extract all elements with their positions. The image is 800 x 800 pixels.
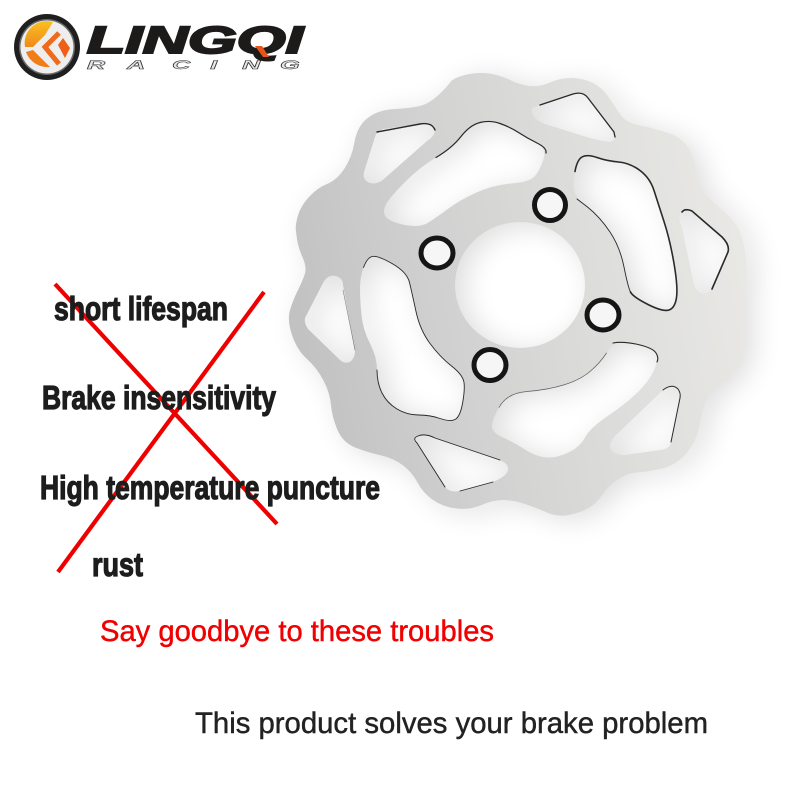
logo tagline: RACING: [87, 59, 300, 72]
brake disc photo: [289, 73, 755, 520]
slot edge shading: [343, 93, 728, 491]
problem label: rust: rust: [92, 546, 143, 583]
logo Q tail: [255, 46, 269, 57]
logo emblem: [14, 14, 80, 80]
black closing statement: This product solves your brake problem: [195, 707, 708, 740]
bolt ring: bottom: [474, 350, 506, 380]
disc soft shadow: [298, 77, 755, 520]
problem label: short lifespan: short lifespan: [54, 290, 228, 327]
bolt ring: top: [534, 190, 566, 220]
problem label: high temperature puncture: High temperature puncture: [40, 469, 380, 506]
bolt ring: left: [421, 238, 453, 268]
problem label: brake insensitivity: Brake insensitivity: [42, 379, 277, 416]
red slogan: Say goodbye to these troubles: [100, 615, 494, 648]
red cross: line one: [55, 284, 277, 524]
logo wordmark: LINGQI: [87, 20, 305, 62]
red cross: line two: [58, 292, 264, 572]
logo: LINGQI Racing: [14, 14, 305, 80]
bolt ring: right: [587, 300, 619, 330]
disc steel body: [289, 73, 746, 516]
